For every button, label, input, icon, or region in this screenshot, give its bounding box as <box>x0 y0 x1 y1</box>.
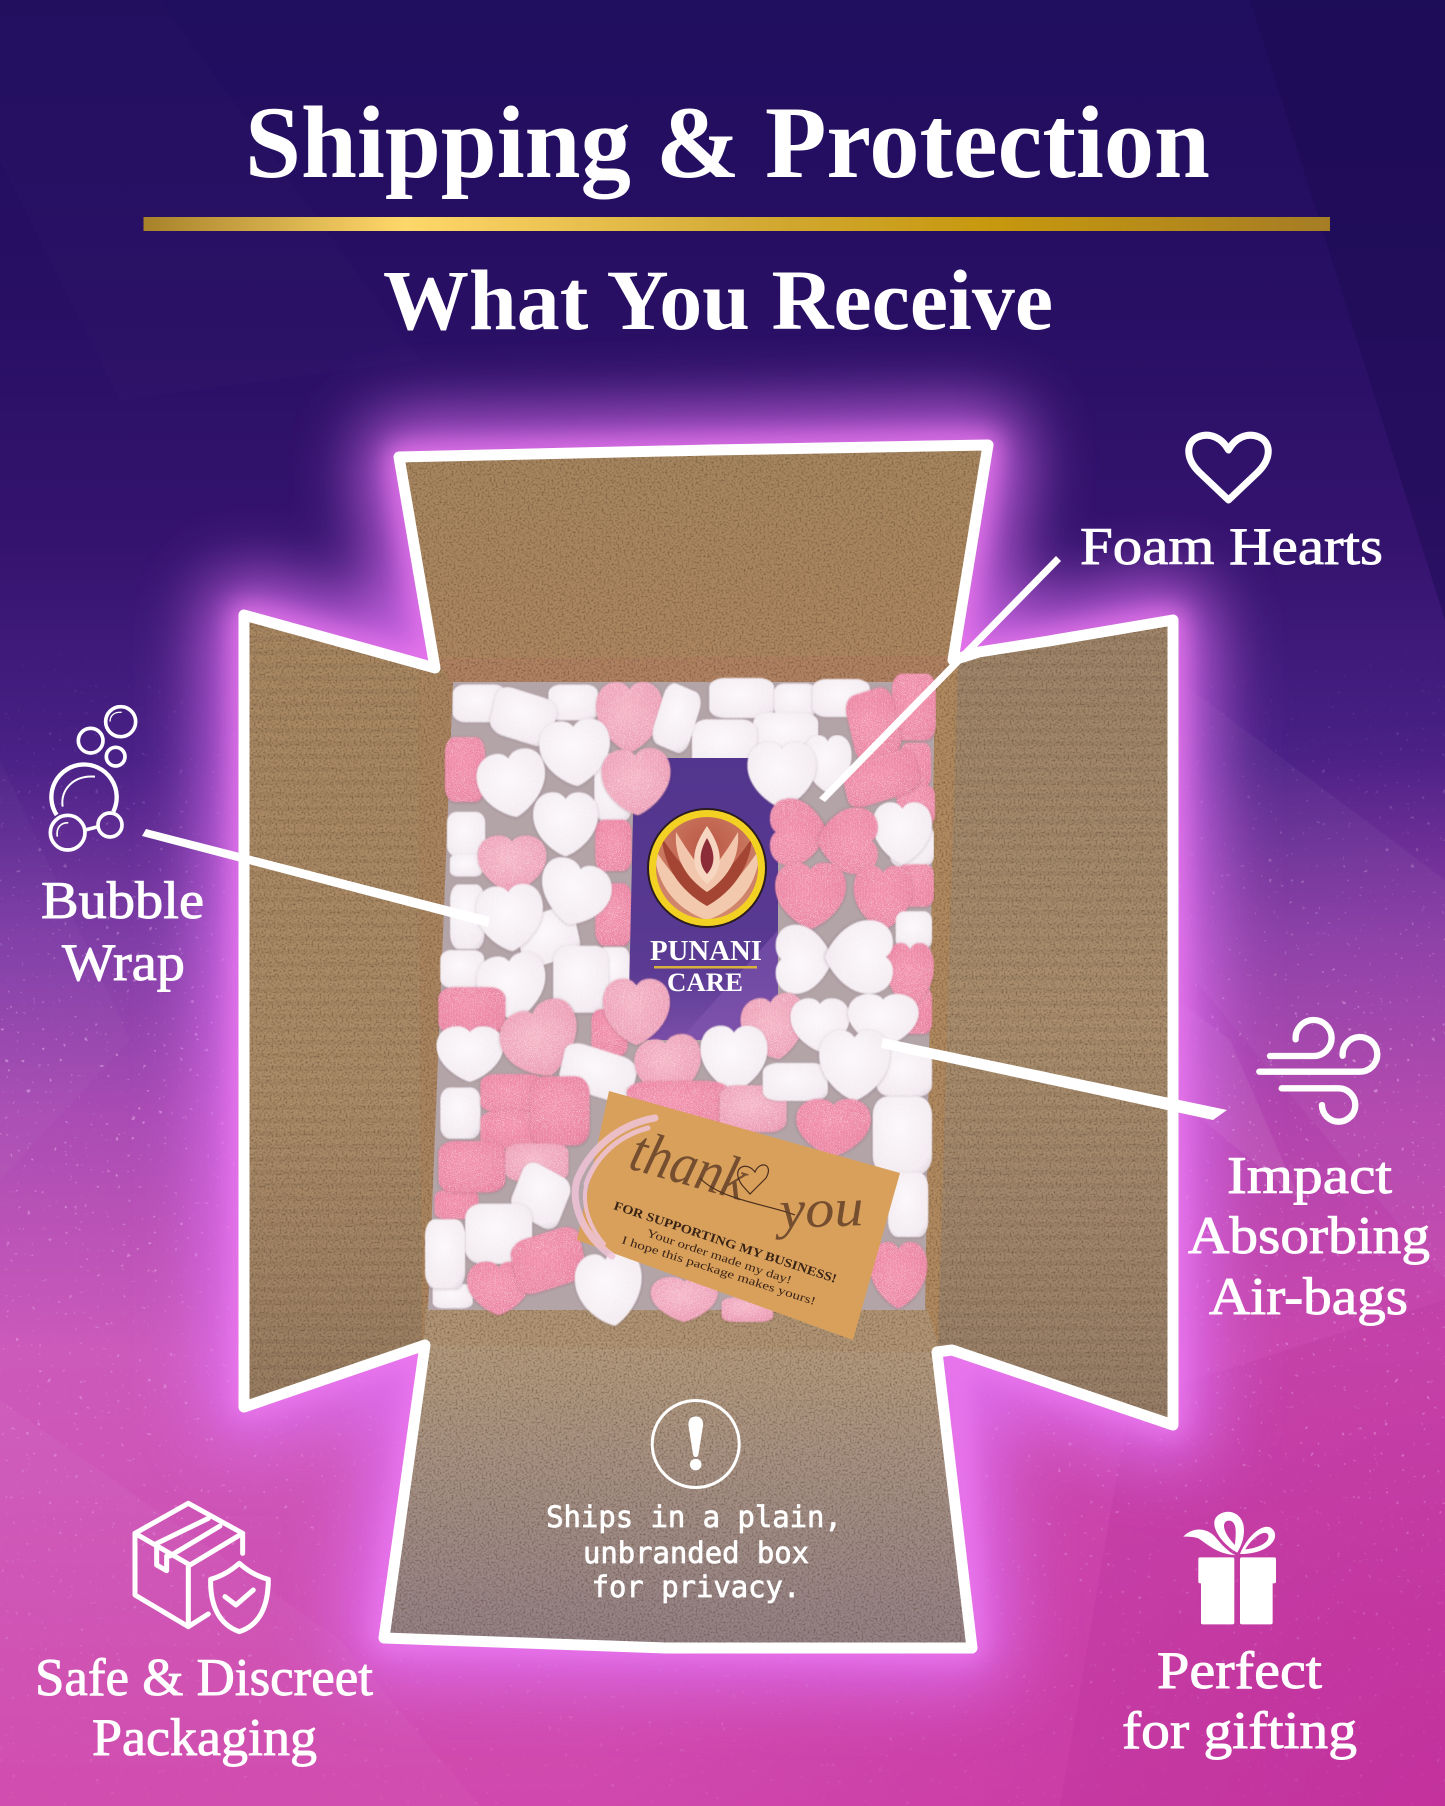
label: perfect for gifting <box>1122 1642 1357 1760</box>
thank you card: you <box>773 1177 864 1240</box>
product card: Punani Care <box>628 758 778 1040</box>
label: impact absorbing air-bags: Absorbing <box>1188 1207 1430 1265</box>
label: bubble wrap: Wrap <box>62 934 185 992</box>
label: perfect for gifting: for gifting <box>1122 1702 1357 1760</box>
product card: Punani Care: CARE <box>667 968 743 997</box>
pointer line: bubble wrap <box>142 829 490 927</box>
label: safe and discreet packaging: Safe & Discreet <box>35 1649 373 1707</box>
foam hearts front layer <box>425 735 934 1333</box>
label: impact absorbing air-bags: Air-bags <box>1209 1268 1408 1326</box>
label: perfect for gifting: Perfect <box>1157 1642 1322 1700</box>
foam hearts back layer <box>436 673 936 1082</box>
icon: exclamation circle <box>652 1400 739 1488</box>
thank you card: I hope this package makes yours! <box>620 1234 817 1308</box>
label: bubble wrap: Bubble <box>41 872 204 930</box>
privacy note <box>546 1500 842 1604</box>
icon: gift <box>1183 1512 1276 1624</box>
privacy note: for privacy. <box>592 1570 800 1604</box>
logo medallion <box>647 808 767 928</box>
subtitle: What You Receive <box>383 252 1053 348</box>
pink feather <box>575 1118 655 1256</box>
privacy note: unbranded box <box>583 1536 809 1570</box>
label: foam hearts: Foam Hearts <box>1080 518 1383 576</box>
gold divider bar <box>144 217 1330 231</box>
thank you card: FOR SUPPORTING MY BUSINESS! <box>612 1199 839 1286</box>
script thank you: thank <box>623 1117 756 1213</box>
pointer line: air-bags <box>881 1038 1227 1120</box>
label: bubble wrap <box>41 872 204 992</box>
label: impact absorbing air-bags <box>1188 1147 1430 1326</box>
privacy note: Ships in a plain, <box>546 1500 842 1534</box>
label: impact absorbing air-bags: Impact <box>1227 1147 1392 1205</box>
title: Shipping & Protection <box>245 86 1210 200</box>
label: safe and discreet packaging <box>35 1649 373 1767</box>
pointer line: foam hearts <box>819 556 1061 802</box>
white box outline <box>244 445 1173 1648</box>
box glow <box>244 445 1173 1648</box>
icon: heart <box>1189 435 1268 500</box>
open cardboard box <box>230 430 1190 1660</box>
thank you card <box>577 1091 900 1340</box>
icon: package with shield <box>135 1503 268 1632</box>
thank you card: Your order made my day! <box>645 1227 793 1287</box>
icon: bubbles <box>50 707 136 850</box>
brand name: PUNANI <box>650 936 762 967</box>
label: safe and discreet packaging: Packaging <box>92 1709 317 1767</box>
icon: air wind <box>1259 1020 1377 1122</box>
